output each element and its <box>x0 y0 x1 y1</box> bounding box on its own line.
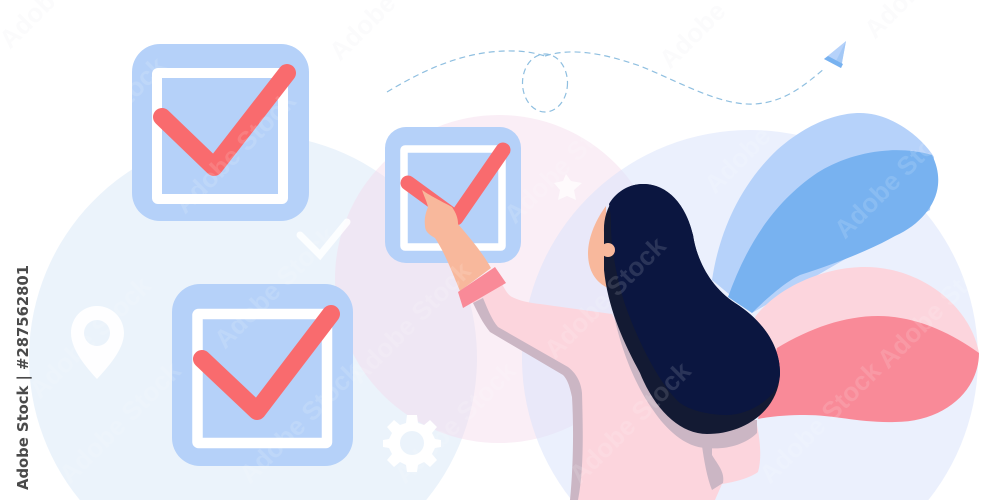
watermark text: Adobe Stock <box>828 110 962 244</box>
checkbox: bottom <box>172 284 353 466</box>
watermark text: Adobe Stock <box>233 355 367 489</box>
watermark text: Adobe Stock <box>53 355 187 489</box>
arm <box>422 190 491 291</box>
hair shadow <box>604 184 780 434</box>
hair <box>609 184 780 415</box>
watermark text: Adobe Stock <box>563 355 697 489</box>
checkbox: middle <box>385 127 521 263</box>
watermark text: Adobe Stock <box>38 50 172 184</box>
watermark text: Adobe Stock <box>388 355 522 489</box>
icon: star <box>554 174 582 200</box>
ear <box>601 243 615 257</box>
watermark text: Adobe Stock <box>208 220 342 354</box>
icon: location pin <box>71 306 124 379</box>
dress fold <box>702 446 723 490</box>
body <box>470 280 760 500</box>
icon: white tick <box>300 222 347 255</box>
stock id label: Adobe Stock | #287562801 <box>14 265 33 490</box>
watermark text: Adobe Stock <box>498 95 632 229</box>
watermark text: Adobe Stock <box>538 230 672 364</box>
petals: pink <box>755 267 979 422</box>
icon: gear <box>383 415 441 472</box>
face <box>588 206 608 288</box>
hair shadow on body <box>610 295 757 448</box>
background circle: right blue <box>522 130 978 500</box>
arm shadow <box>473 298 583 500</box>
background circle: left blue <box>29 134 477 500</box>
checkbox: top left <box>132 44 309 221</box>
dashed flight path <box>387 51 825 112</box>
background circle: centre pink <box>335 115 663 443</box>
cuff <box>458 267 506 308</box>
watermark text: Adobe Stock <box>23 270 157 404</box>
icon: paper plane <box>824 41 846 68</box>
watermark text: Adobe Stock <box>343 255 477 389</box>
petals: blue <box>712 113 938 313</box>
watermark text: Adobe Stock <box>168 85 302 219</box>
watermark text: Adobe Stock <box>753 355 887 489</box>
watermark text: Adobe Stock <box>698 65 832 199</box>
woman figure <box>422 184 780 500</box>
